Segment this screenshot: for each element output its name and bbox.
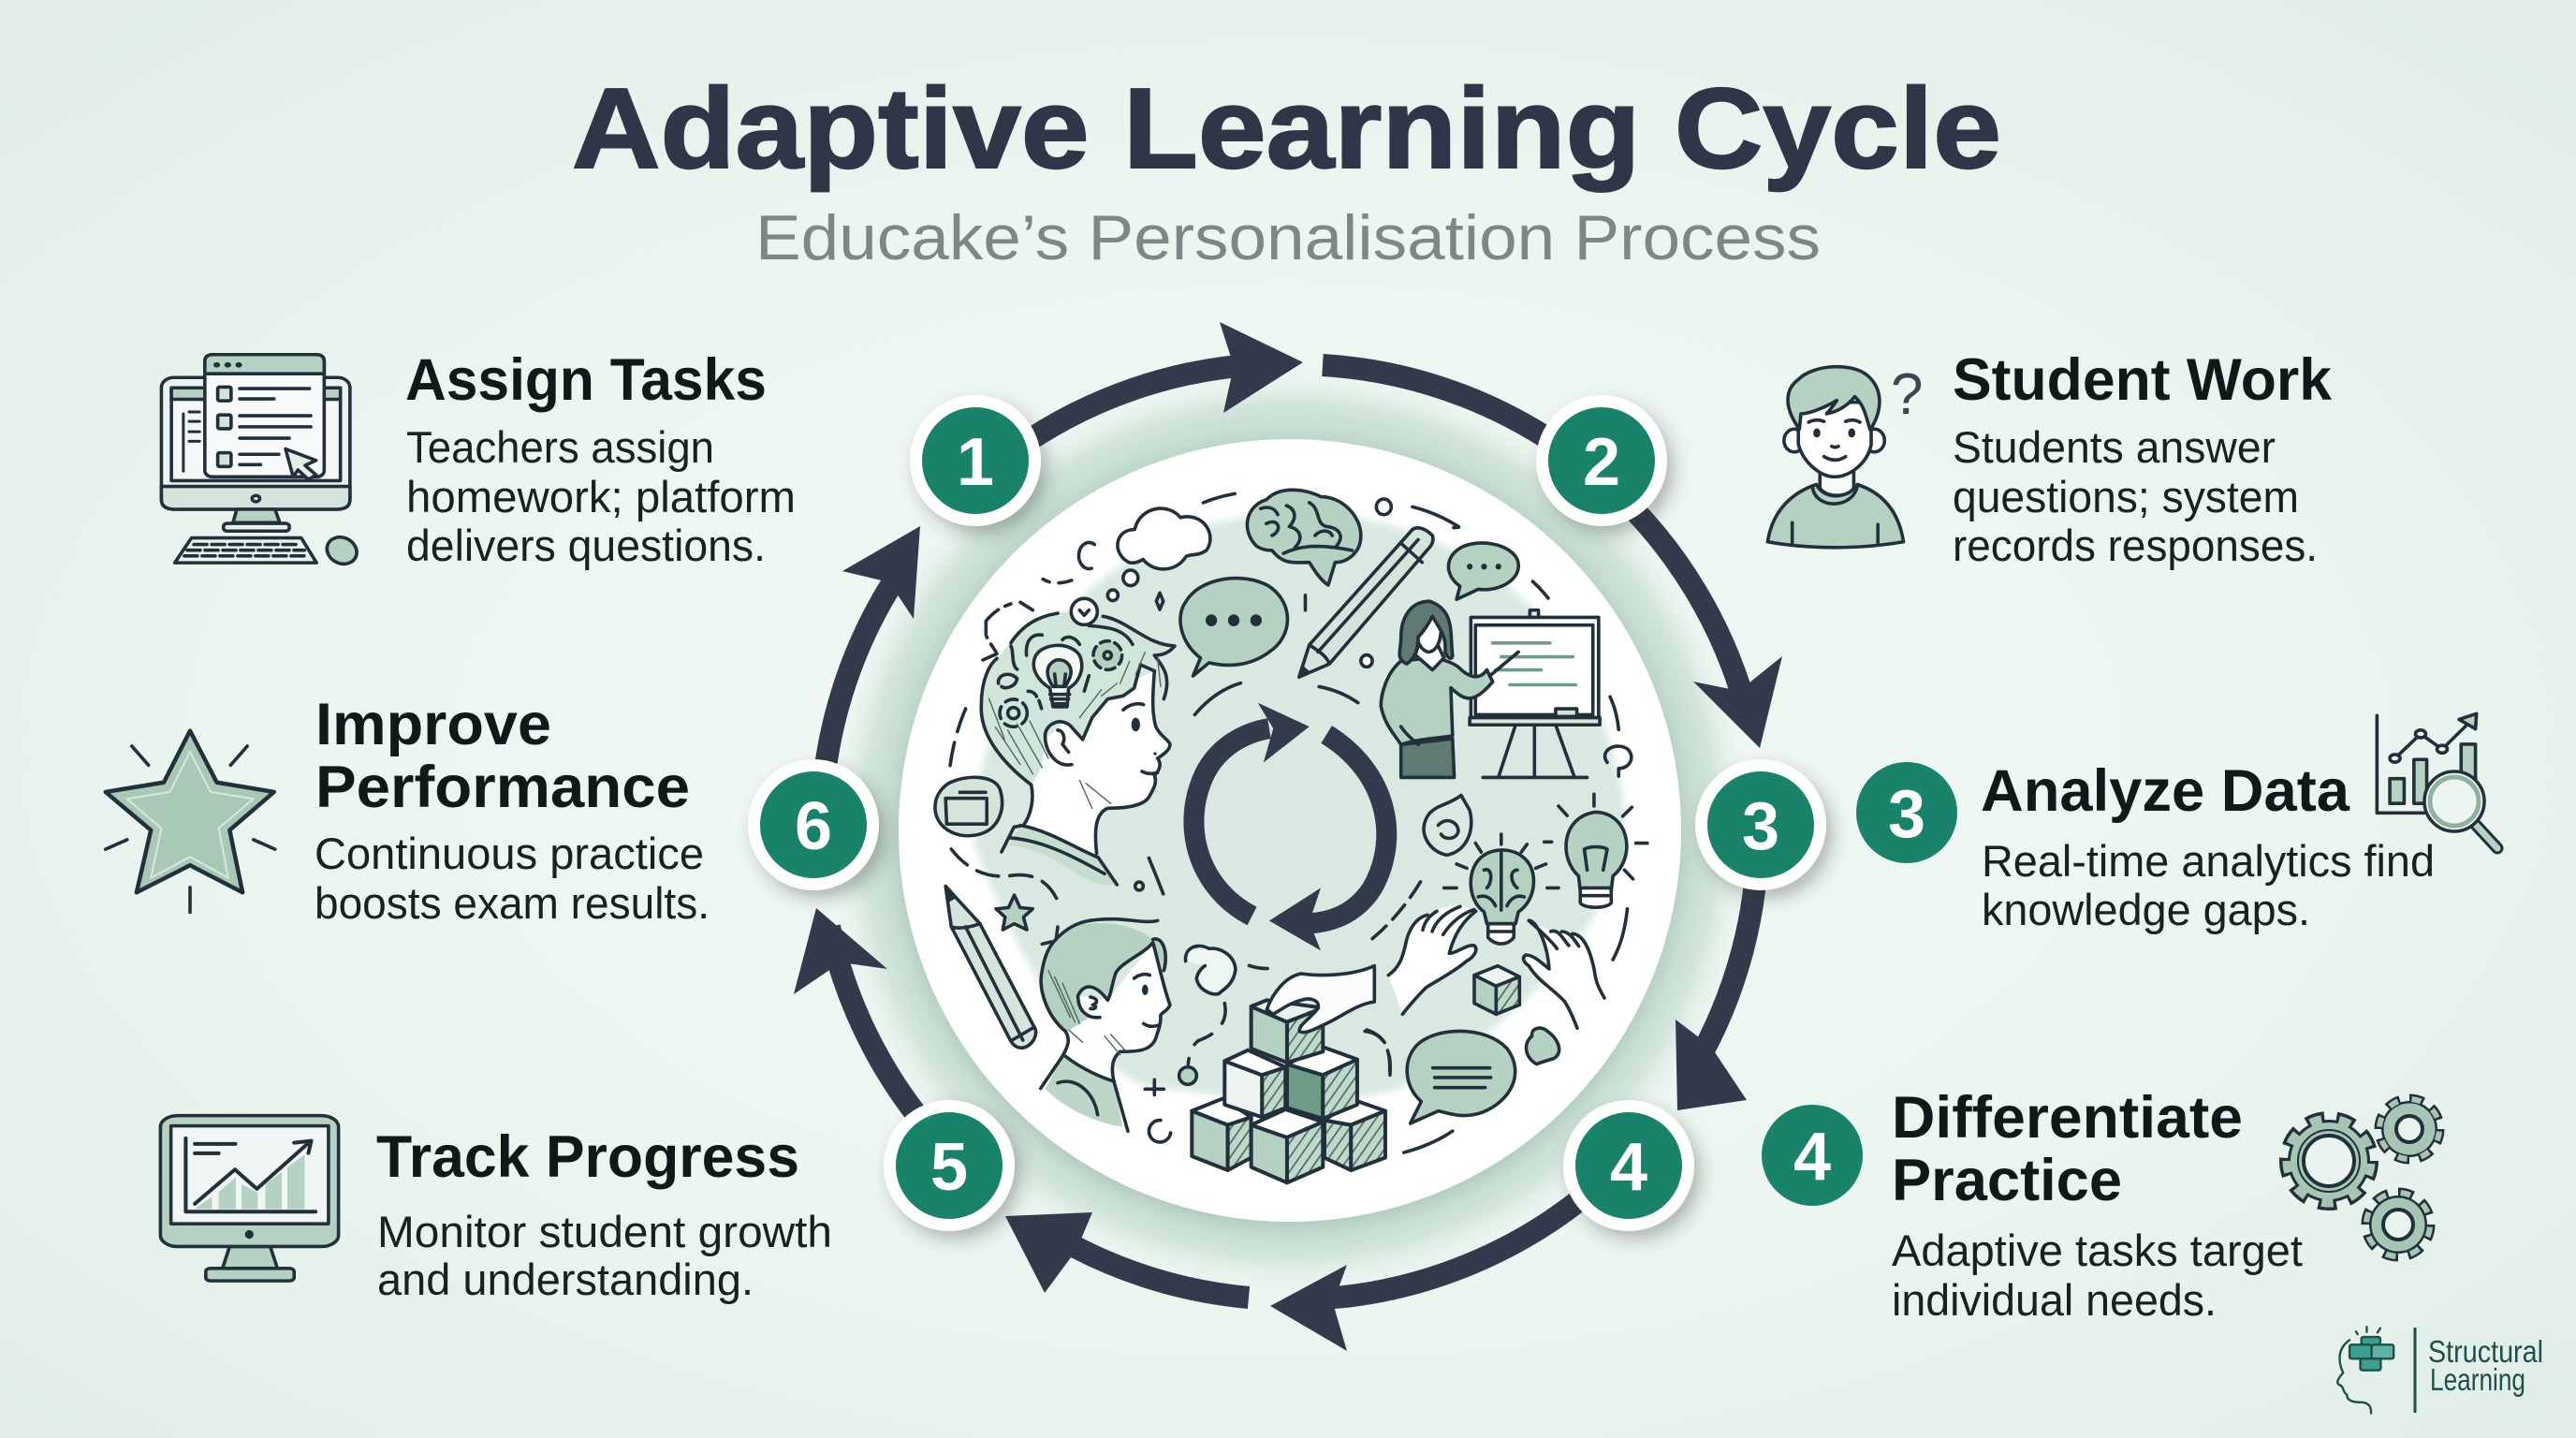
badge 6 (748, 759, 879, 890)
description: improve performance (315, 829, 710, 928)
right hands, cube and bubble (1388, 905, 1604, 1123)
small circles (1107, 499, 1391, 667)
description: differentiate practice (1892, 1225, 2303, 1325)
description: student work: records responses. (1953, 521, 2318, 570)
folder bubble (935, 777, 1003, 836)
speech bubble with dots (1180, 579, 1287, 676)
description: analyze data (1982, 836, 2435, 934)
description: student work: Students answer (1953, 422, 2276, 472)
icon: chart and magnifier (2377, 713, 2497, 848)
side badge 3: 3 (1888, 777, 1925, 852)
badge 4: 4 (1610, 1130, 1647, 1205)
description: analyze data: Real-time analytics find (1982, 836, 2435, 886)
logo divider (2413, 1328, 2417, 1413)
badge 3: 3 (1742, 789, 1779, 864)
heading: analyze data: Analyze Data (1981, 758, 2350, 824)
number badges on ring (748, 395, 1826, 1231)
description: improve performance: Continuous practice (315, 829, 704, 878)
arrow: step 1 to 2 (1016, 322, 1303, 449)
step 5: track progress (160, 1116, 832, 1304)
description: student work: questions; system (1953, 472, 2299, 521)
description: track progress: and understanding. (377, 1255, 754, 1304)
central illustration (935, 490, 1647, 1182)
brain light bulb with rays (1444, 834, 1559, 944)
icon: computer with task list (161, 355, 362, 568)
description: track progress: Monitor student growth (377, 1207, 832, 1256)
step 3: analyze data (1856, 713, 2497, 934)
logo wordmark (2428, 1334, 2543, 1397)
icon: student with question mark (1767, 362, 1923, 548)
left pencil (945, 887, 1036, 1048)
step 1: assign tasks (161, 347, 796, 570)
boy, blocks and hand (1041, 919, 1390, 1182)
arrow: step 2 to 3 (1323, 365, 1782, 748)
description: improve performance: boosts exam results. (315, 878, 710, 928)
badge 6: 6 (795, 789, 832, 864)
large pencil (1299, 528, 1433, 677)
arrow: step 5 to 5 badge (1005, 1212, 1249, 1298)
side badge 4 (1762, 1105, 1863, 1206)
icon: student with question mark: ? (1891, 362, 1923, 427)
heading: improve performance: Improve (315, 692, 551, 757)
spiral bubble (1424, 796, 1471, 855)
speech bubble with lines (1407, 1031, 1515, 1123)
small cube (1474, 966, 1519, 1014)
heading: differentiate practice: Differentiate (1892, 1085, 2243, 1151)
step 2: student work (1767, 347, 2333, 570)
hand placing block (1266, 966, 1374, 1033)
logo wordmark: Learning (2430, 1362, 2525, 1397)
badge 1 (910, 395, 1041, 526)
pale ring behind central disc (827, 367, 1753, 1294)
description: assign tasks: homework; platform (406, 472, 796, 521)
student head with ideas (981, 598, 1175, 886)
side badge 4: 4 (1793, 1120, 1831, 1195)
hollow marker (1605, 746, 1632, 776)
stacked blocks (1192, 1000, 1385, 1182)
arrow: step 6 to 1 (822, 526, 920, 805)
mint blob (1526, 1028, 1559, 1064)
description: assign tasks: Teachers assign (406, 422, 714, 472)
teacher at whiteboard (1381, 601, 1600, 777)
plus and circle marks (1145, 1030, 1390, 1142)
subtitle: Educake’s Personalisation Process (755, 202, 1821, 273)
icon: monitor with growth chart (160, 1116, 339, 1281)
badge 2 (1536, 395, 1667, 526)
badge 5 (884, 1100, 1015, 1231)
heading: improve performance (315, 692, 690, 820)
dashes around the scene (950, 493, 1627, 1152)
arrow: step 4 to 5 (1270, 1174, 1610, 1351)
small star (996, 895, 1032, 930)
icon: head with blocks (2337, 1327, 2393, 1414)
cycle arrows (794, 322, 1782, 1351)
mint interior wash (973, 513, 1625, 1100)
description: analyze data: knowledge gaps. (1982, 885, 2310, 934)
heading: track progress: Track Progress (376, 1124, 799, 1190)
lit bulb with rays (1544, 794, 1647, 907)
logo: structural learning (2337, 1327, 2543, 1414)
badge 2: 2 (1583, 425, 1620, 500)
title: Adaptive Learning Cycle (572, 65, 2001, 192)
arrow: step 5 to 6 (794, 908, 948, 1152)
description: assign tasks: delivers questions. (406, 521, 766, 570)
description: differentiate practice: individual needs. (1892, 1275, 2217, 1325)
step 6: improve performance (106, 692, 710, 928)
icon: star with rays (106, 731, 275, 912)
icon: three gears (2287, 1099, 2439, 1256)
thought cloud (1118, 508, 1210, 569)
left reaching hand (1388, 905, 1476, 1014)
heading: differentiate practice: Practice (1892, 1148, 2122, 1213)
description: differentiate practice: Adaptive tasks target (1892, 1225, 2303, 1275)
heading: student work: Student Work (1953, 347, 2333, 413)
right reaching hand (1524, 920, 1604, 1028)
heading: differentiate practice (1892, 1085, 2243, 1213)
badge 1: 1 (957, 425, 994, 500)
small speech bubble (1448, 543, 1518, 599)
small cloud and dashed path (1179, 946, 1236, 1084)
top brain (1247, 490, 1361, 585)
heading: assign tasks: Assign Tasks (405, 347, 767, 413)
description: track progress (377, 1207, 832, 1304)
central recycle arrows (1193, 703, 1386, 950)
badge 5: 5 (930, 1130, 968, 1205)
heading: improve performance: Performance (315, 755, 690, 820)
side badge 3 (1856, 762, 1957, 863)
central white disc (899, 439, 1681, 1222)
badge 3 (1695, 759, 1826, 890)
arrow: step 3 to 4 (1676, 831, 1758, 1110)
badge 4 (1563, 1100, 1694, 1231)
logo wordmark: Structural (2428, 1334, 2543, 1369)
upper and right doodles (935, 490, 1647, 1152)
step 4: differentiate practice (1762, 1085, 2439, 1325)
description: student work (1953, 422, 2318, 570)
description: assign tasks (406, 422, 796, 570)
boy at bottom left (1041, 919, 1170, 1131)
